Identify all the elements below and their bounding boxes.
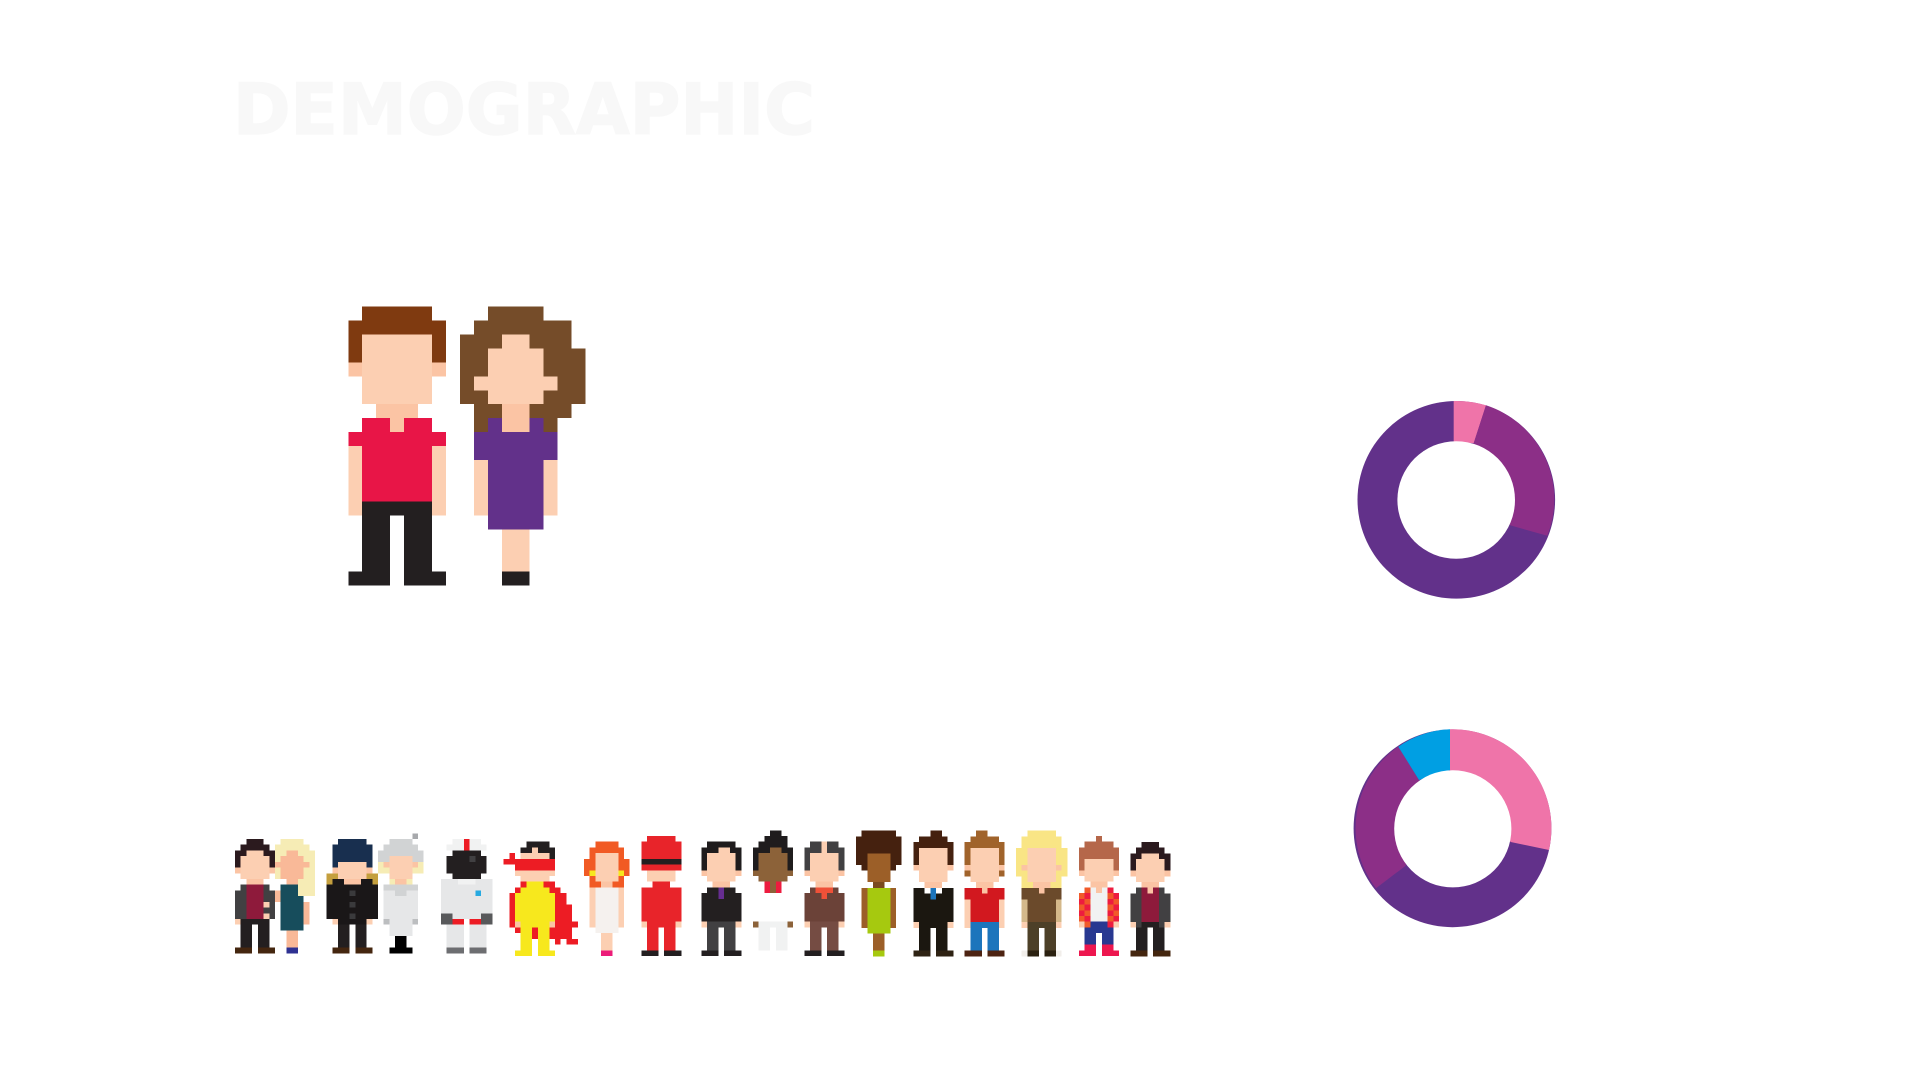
icon: character 15, long blonde hair and brown shirt: [1016, 831, 1067, 956]
icon: character 8, all-red figure with hat: [641, 836, 681, 956]
icon: character 6, yellow superhero with red cape: [504, 842, 578, 956]
icon: character 1, maroon shirt and grey jacket: [235, 839, 275, 953]
icon: character 5, astronaut: [441, 839, 492, 953]
title: DEMOGRAPHIC: [233, 69, 815, 151]
icon: character 3, navy hat and black coat: [327, 839, 378, 953]
icon: character 10, brown-skinned figure in white with hair bun: [753, 830, 793, 950]
icon: character 2, blonde woman in teal dress: [275, 839, 315, 953]
icon: character 7, red-haired woman in white dress: [584, 842, 630, 956]
icon: character 9, black suit with purple tie: [701, 842, 741, 956]
icon: character 11, grey-haired man in brown suit: [804, 842, 844, 956]
icon: large man figure: [348, 307, 446, 585]
chart: lower donut: [1354, 729, 1551, 927]
icon: large woman figure: [460, 307, 585, 585]
icon: character 17, maroon shirt and grey jacket: [1130, 842, 1170, 956]
icon: character 12, afro woman in green dress: [856, 831, 902, 956]
icon: character 13, black suit with blue tie: [913, 831, 953, 956]
icon: character 4, white-haired scientist: [378, 833, 424, 953]
icon: character 16, plaid jacket and red shoes: [1079, 836, 1119, 956]
icon: character 14, red shirt and blue jeans: [965, 831, 1005, 956]
chart: upper donut: [1358, 401, 1555, 599]
